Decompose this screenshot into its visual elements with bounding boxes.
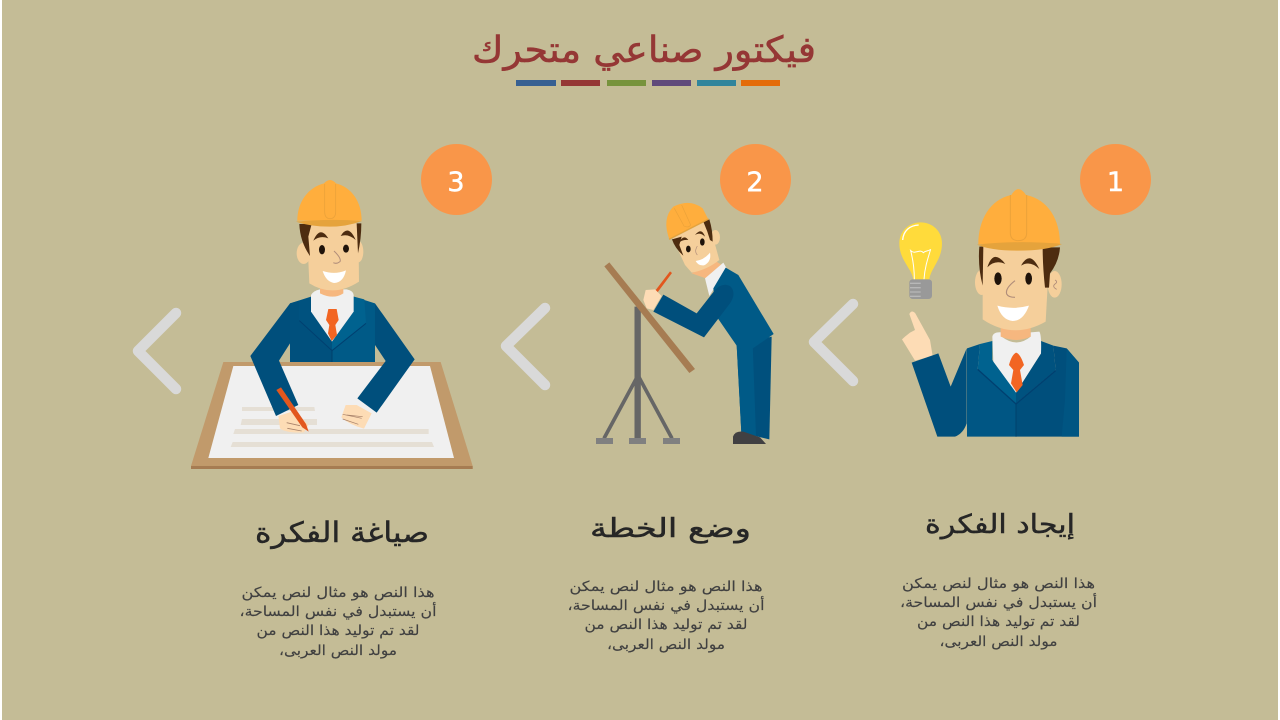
heading: step 3: صياغة الفكرة	[255, 516, 429, 549]
arrow: step 1 to step 2	[814, 304, 853, 381]
text block: step 1: لقد تم توليد هذا النص من	[917, 614, 1080, 630]
text block: step 1: أن يستبدل في نفس المساحة،	[900, 593, 1097, 611]
icon: engineer writing at desk	[191, 180, 473, 469]
heading: step 2: وضع الخطة	[590, 514, 751, 544]
number badge 1	[1080, 144, 1151, 215]
text block: step 1	[900, 576, 1097, 650]
colour bars under title	[516, 80, 780, 86]
title: فيكتور صناعي متحرك	[472, 30, 816, 71]
icon: engineer with light bulb	[899, 189, 1079, 437]
text block: step 2: هذا النص هو مثال لنص يمكن	[570, 579, 762, 595]
number badge 1: 1	[1107, 167, 1124, 198]
text block: step 2	[568, 579, 765, 653]
panel: step 3	[191, 144, 492, 659]
icon: engineer at drafting table	[596, 203, 774, 444]
number badge 2	[720, 144, 791, 215]
panel: step 2	[568, 144, 791, 653]
arrow: step 2 to step 3	[506, 308, 545, 385]
text block: step 2: لقد تم توليد هذا النص من	[584, 617, 748, 633]
text block: step 1: هذا النص هو مثال لنص يمكن	[902, 576, 1095, 592]
text block: step 3: هذا النص هو مثال لنص يمكن	[242, 585, 434, 601]
text block: step 3: لقد تم توليد هذا النص من	[256, 623, 420, 639]
text block: step 2: أن يستبدل في نفس المساحة،	[568, 596, 765, 614]
number badge 2: 2	[746, 167, 764, 198]
panel: step 1	[899, 144, 1151, 650]
text block: step 3	[240, 585, 437, 659]
text block: step 1: مولد النص العربى،	[940, 634, 1058, 650]
text block: step 3: أن يستبدل في نفس المساحة،	[240, 602, 437, 620]
arrow: towards step 3	[138, 313, 176, 389]
number badge 3: 3	[447, 167, 465, 198]
number badge 3	[421, 144, 492, 215]
text block: step 3: مولد النص العربى،	[279, 643, 397, 659]
text block: step 2: مولد النص العربى،	[607, 637, 725, 653]
heading: step 1: إيجاد الفكرة	[925, 510, 1075, 540]
